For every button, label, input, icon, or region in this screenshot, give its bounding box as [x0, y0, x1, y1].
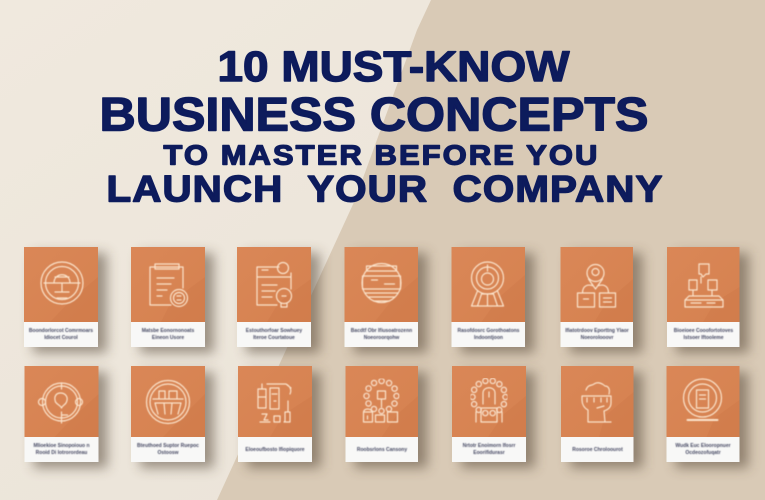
- label: Boondorlorcot Comrmoars: [29, 328, 93, 334]
- label: [458, 328, 520, 341]
- panel: card 8: [24, 366, 108, 468]
- label: [351, 328, 412, 341]
- label: [142, 328, 194, 341]
- label: Estouthorfoar Sowhuey: [246, 328, 302, 334]
- label: Rooid Di Iotrorordeau: [36, 450, 87, 456]
- icon: document with bulb: [257, 262, 292, 307]
- panel: card 1: [24, 247, 107, 353]
- panel: card 7: [667, 247, 749, 353]
- label: Eloeoufbosto Ifiopiquore: [245, 447, 305, 453]
- panel: card 11: [346, 366, 428, 468]
- panel: card 10: [238, 366, 321, 468]
- label: Eineon Usore: [152, 335, 184, 341]
- icon: head in target ring: [38, 383, 82, 423]
- panel: card 5: [452, 247, 534, 353]
- label: Ostoosw: [157, 450, 179, 456]
- label: Iteroe Courtatoue: [253, 335, 295, 341]
- label: Eoorifidurasr: [473, 450, 505, 456]
- panel: card 12: [452, 366, 535, 468]
- title: [100, 44, 664, 210]
- label: Rasofdosrc Gorothoatons: [458, 328, 520, 334]
- label: Matsbe Eonornonoats: [142, 328, 194, 334]
- icon: banded globe: [362, 264, 401, 302]
- label: [246, 328, 302, 341]
- label: Ifiatotrdoov Eporttng Ylaor: [565, 328, 629, 334]
- icon: balance circle: [41, 262, 83, 304]
- label: Rosoroe Chroloourot: [572, 447, 623, 453]
- label: [463, 443, 515, 456]
- label: [33, 443, 90, 456]
- title line 4: LAUNCH YOUR COMPANY: [106, 168, 664, 210]
- panel: card 9: [131, 366, 214, 468]
- icon: wreath over buildings: [364, 381, 398, 422]
- panel: card 13: [561, 366, 643, 468]
- label: Indoontjoon: [474, 335, 503, 341]
- label: [565, 328, 629, 341]
- label: Roobsrlons Cansony: [357, 447, 407, 453]
- label: Bteuthoed Suptor Ruepoc: [137, 443, 199, 449]
- icon: raised fist with crown: [582, 383, 611, 422]
- label: Idiocet Courol: [44, 335, 78, 341]
- background: tan diagonal right panel: [217, 0, 765, 500]
- label: [675, 443, 731, 456]
- icon: emblem circle with building: [146, 380, 190, 424]
- icon: network of boxes over platform: [685, 264, 723, 307]
- label: [674, 328, 733, 341]
- icon: tools and bottles: [258, 384, 291, 422]
- title line 1: 10 MUST-KNOW: [218, 44, 570, 91]
- label: Istsoer Iftooleme: [683, 335, 724, 341]
- icon: wreath around tower: [472, 380, 506, 422]
- label: Noeorolooovr: [581, 335, 613, 341]
- icon: phone in orbit ring: [684, 379, 722, 420]
- icon: clipboard with badge: [150, 264, 188, 306]
- label: Nrtotr Enoimorn Ifosrr: [463, 443, 515, 449]
- panel: card 2: [131, 247, 214, 353]
- label: [29, 328, 93, 341]
- icon: target on tripod: [472, 262, 504, 306]
- panel: card 3: [237, 247, 320, 353]
- label: Wudk Euc Elooropnuer: [675, 443, 731, 449]
- panel: card 6: [560, 247, 642, 353]
- label: [137, 443, 199, 456]
- label: Noeoroorqohw: [364, 335, 399, 341]
- label: Ocdeozofuqatr: [685, 450, 721, 456]
- panel: card 14: [666, 366, 748, 468]
- label: Bacdtf Obr Ifiusoatrozenn: [351, 328, 412, 334]
- icon: person with location pin and boxes: [578, 264, 616, 307]
- label: Bioeioee Cooofortotoves: [674, 328, 733, 334]
- title line 3: TO MASTER BEFORE YOU: [164, 140, 600, 170]
- panel: card 4: [344, 247, 428, 353]
- title line 2: BUSINESS CONCEPTS: [100, 88, 648, 141]
- label: Mlioekioe Sinopoiouo n: [33, 443, 90, 449]
